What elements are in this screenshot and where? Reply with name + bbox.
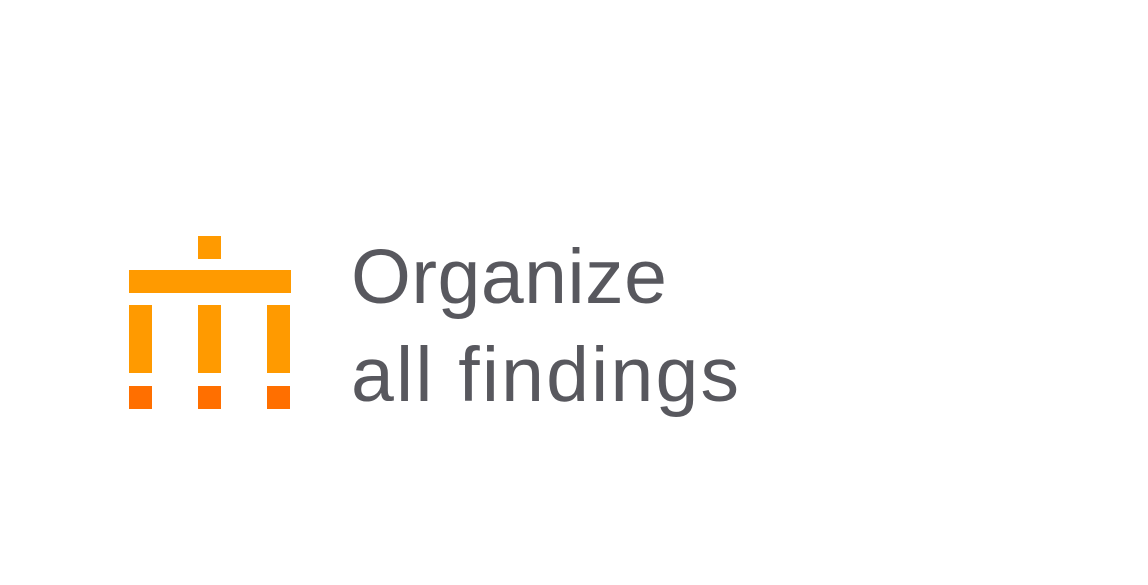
- title text: all findings: [351, 332, 741, 418]
- title text: Organize: [351, 234, 667, 320]
- icon: organize structure: [129, 236, 291, 409]
- title text: [351, 234, 741, 418]
